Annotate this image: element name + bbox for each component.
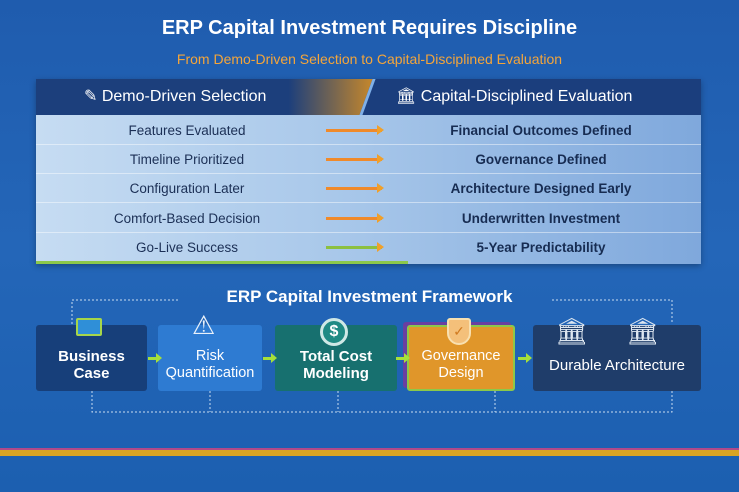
- step: business case: Business: [58, 348, 125, 365]
- framework title: ERP Capital Investment Framework: [227, 287, 512, 306]
- header left: demo-driven: ✎ Demo-Driven Selection: [84, 88, 266, 105]
- step: total cost modeling: Total Cost: [300, 348, 372, 365]
- rows: Underwritten Investment: [462, 211, 620, 226]
- rows: Go-Live Success: [136, 240, 238, 255]
- table header: [36, 79, 701, 115]
- rows: [36, 123, 701, 255]
- step: durable architecture: [533, 325, 701, 391]
- icon: warning: ⚠: [192, 310, 215, 340]
- icon: dollar: $: [330, 323, 338, 340]
- rows: Architecture Designed Early: [451, 181, 631, 196]
- step: governance design: Design: [438, 365, 484, 381]
- step: risk quantification: Quantification: [166, 365, 254, 381]
- step: total cost modeling: [275, 325, 397, 391]
- step: durable architecture: Durable Architecture: [549, 356, 685, 374]
- step: risk quantification: [158, 325, 262, 391]
- rows: Configuration Later: [130, 181, 244, 196]
- title: ERP Capital Investment Requires Discipline: [162, 17, 577, 39]
- icon: shield: [447, 318, 471, 345]
- step: governance design: [407, 325, 515, 391]
- icon: dollar: [320, 318, 348, 346]
- step: business case: Case: [74, 365, 109, 382]
- step: business case: [36, 325, 147, 391]
- arrow 1: [148, 357, 158, 360]
- rows: 5-Year Predictability: [476, 240, 606, 255]
- comparison table: [36, 79, 701, 264]
- arrow 4: [518, 357, 528, 360]
- step: total cost modeling: Modeling: [303, 365, 369, 382]
- rows: Governance Defined: [475, 152, 607, 167]
- icon: briefcase: [76, 318, 102, 336]
- rows: Financial Outcomes Defined: [450, 123, 632, 138]
- arrow 3: [396, 357, 406, 360]
- arrow 2: [263, 357, 273, 360]
- rows: Timeline Prioritized: [130, 152, 244, 167]
- step: governance design: Governance: [422, 348, 500, 364]
- subtitle: From Demo-Driven Selection to Capital-Disciplined Evaluation: [177, 51, 562, 67]
- bottom stripe: [0, 448, 739, 456]
- step: risk quantification: Risk: [196, 348, 224, 364]
- header right: capital-disciplined: 🏛 Capital-Disciplined Evaluation: [396, 88, 632, 105]
- icon: shield: ✓: [453, 323, 465, 339]
- rows: Features Evaluated: [128, 123, 246, 138]
- icons: buildings: 🏛🏛: [555, 316, 697, 346]
- rows: Comfort-Based Decision: [114, 211, 260, 226]
